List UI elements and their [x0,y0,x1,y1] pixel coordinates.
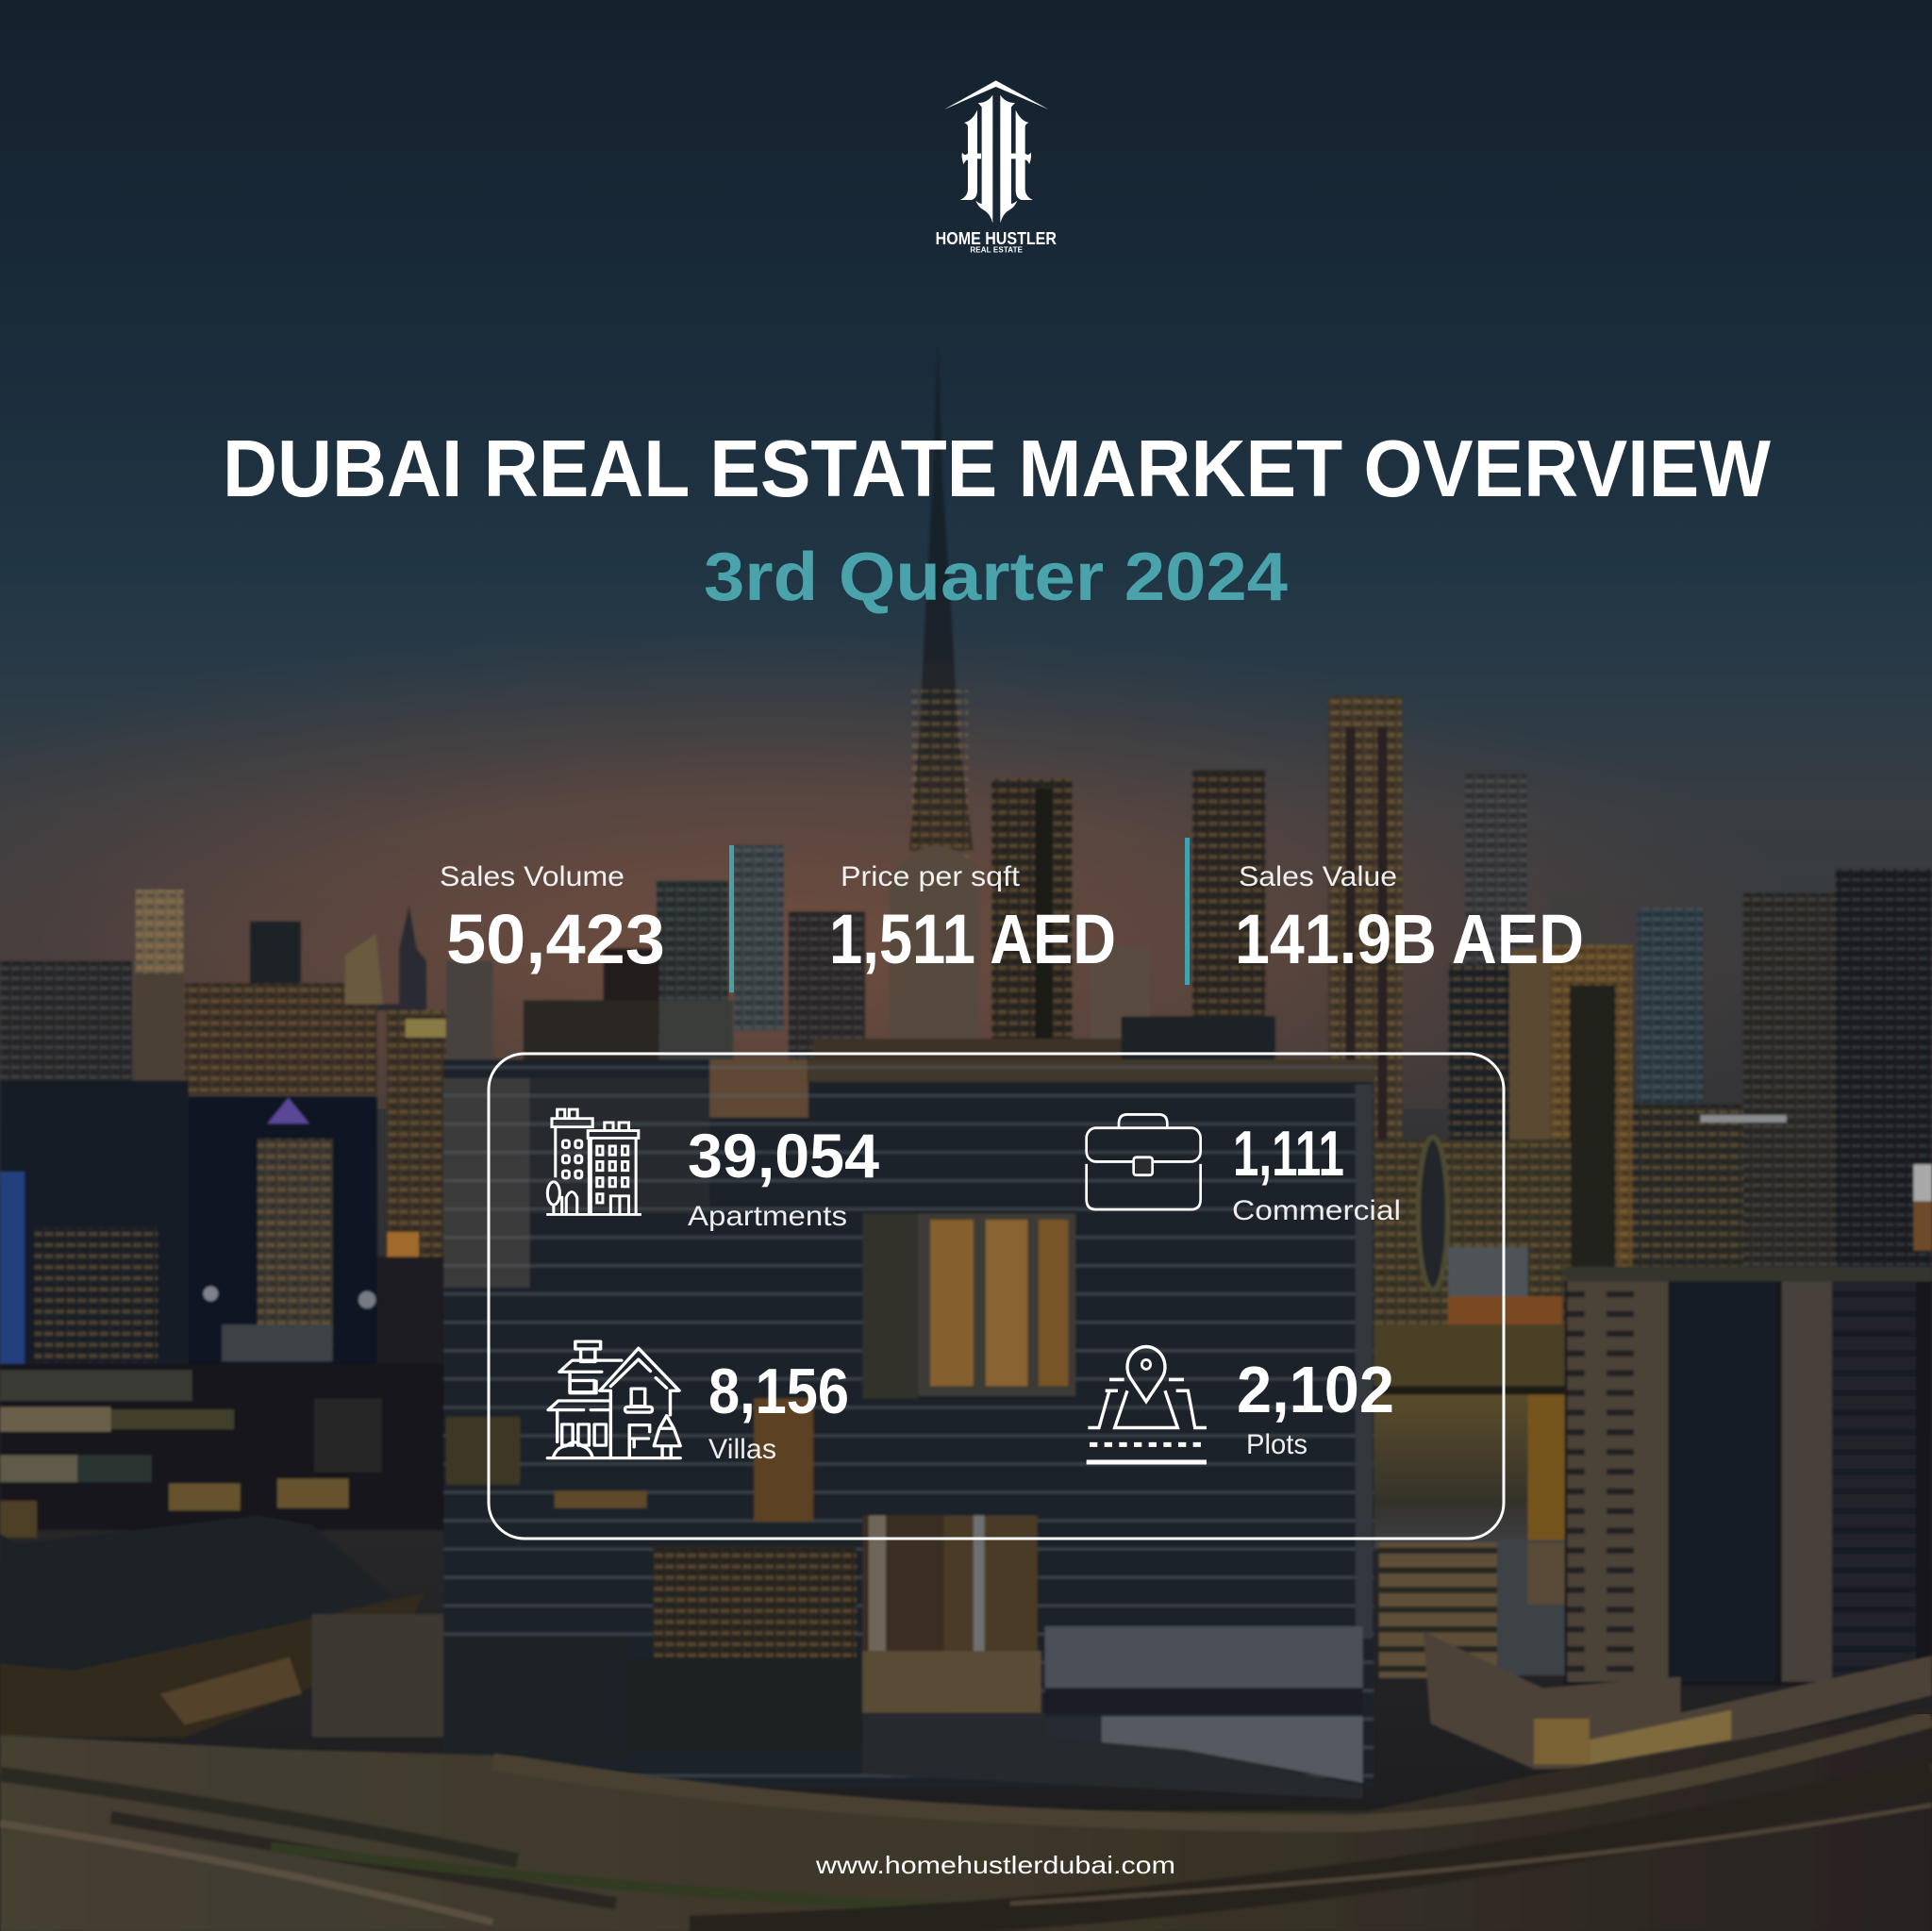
stat: price per sqft [829,861,1116,978]
stat: sales value: 141.9B AED [1235,900,1584,978]
footer website: www.homehustlerdubai.com [815,1851,1175,1879]
stat: sales volume [440,861,665,978]
icon: villa [547,1341,680,1458]
podium [1424,1631,1932,1770]
far towers, left [0,961,132,1084]
icon: briefcase [1087,1114,1201,1209]
stat: sales volume: Sales Volume [440,861,625,892]
subtitle: 3rd Quarter 2024 [704,540,1288,615]
stat: plots: 2,102 [1237,1353,1394,1426]
stat: commercial: Commercial [1232,1195,1401,1226]
stat: sales volume: 50,423 [446,900,665,978]
far towers, centre [1328,696,1402,1140]
stat: commercial [1232,1118,1401,1226]
icon: apartments [546,1109,641,1214]
logo tagline: REAL ESTATE [970,245,1024,254]
divider 1 [729,845,734,992]
left dark block [0,1080,189,1366]
panel: property types [489,1054,1504,1539]
stat: villas [708,1356,849,1465]
stat: plots: Plots [1246,1429,1307,1460]
left waterfront [0,1364,450,1530]
stat: apartments: Apartments [688,1201,847,1232]
stat: price per sqft: Price per sqft [841,861,1021,892]
divider 2 [1185,838,1190,985]
stat: price per sqft: 1,511 AED [829,900,1116,978]
title: DUBAI REAL ESTATE MARKET OVERVIEW [223,424,1772,514]
stat: sales value [1235,861,1584,978]
icon: map pin on plot [1087,1347,1207,1462]
stat: villas: 8,156 [708,1356,849,1427]
stat: plots [1237,1353,1394,1460]
stat: apartments [688,1121,879,1232]
main building [446,961,492,1096]
stat: commercial: 1,111 [1233,1118,1344,1190]
right midground [1374,1140,1571,1392]
right foreground tower [1565,1267,1932,1686]
road and landscaping [0,1706,1932,1931]
far towers, right [1449,965,1509,1248]
arena roof and base [0,1516,391,1671]
stat: sales value: Sales Value [1239,861,1397,892]
logo [936,80,1057,254]
stat: villas: Villas [708,1434,776,1465]
stat: apartments: 39,054 [688,1121,879,1190]
logo wordmark: HOME HUSTLER [936,228,1057,248]
logo mark: roof and monogram [944,80,1049,224]
Burj [909,345,974,850]
